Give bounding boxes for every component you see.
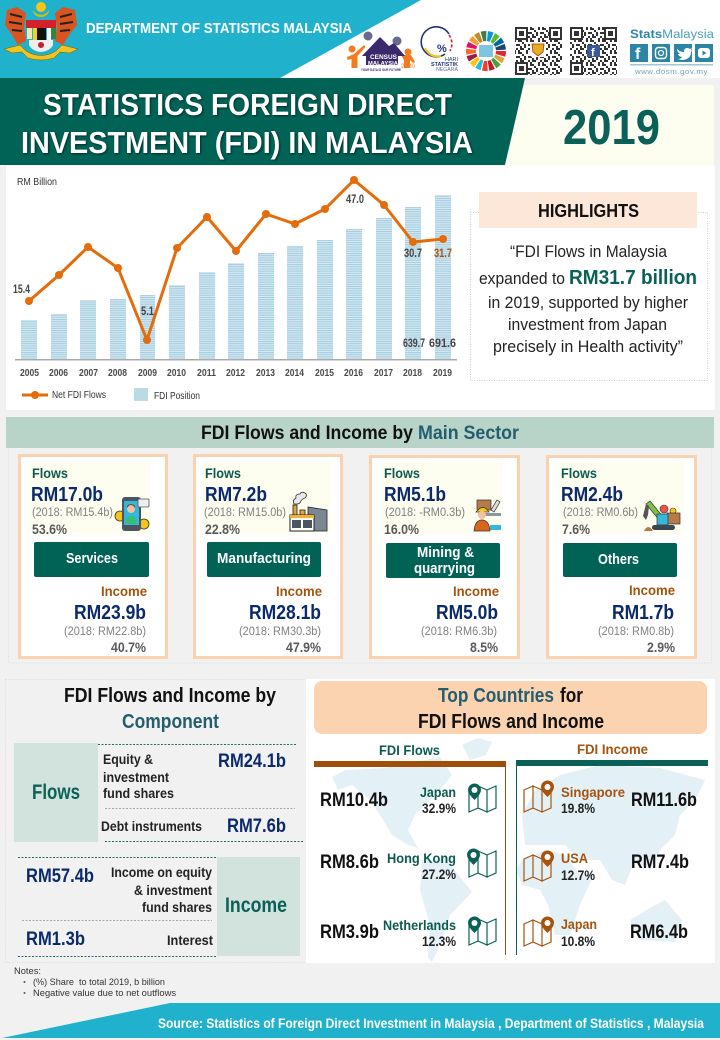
sector label: Manufacturing — [217, 550, 311, 567]
icon: census malaysia logo: YOUR DATA IS OUR FUTURE — [361, 68, 402, 72]
card: others: (2018: RM0.8b) — [598, 626, 674, 638]
income block: Income on equity — [111, 864, 212, 880]
card: mining and quarrying: 8.5% — [470, 640, 498, 655]
year labels: 2014 — [285, 367, 304, 379]
component heading — [64, 685, 277, 733]
icon: excavator and produce — [643, 501, 680, 531]
highlights quote — [479, 242, 697, 356]
card: services: (2018: RM22.8b) — [64, 626, 146, 638]
panel: main sector — [6, 417, 714, 663]
card: mining and quarrying: (2018: -RM0.3b) — [385, 507, 465, 519]
row: Hong Kong flows: 27.2% — [422, 866, 456, 882]
card: others: RM2.4b — [561, 484, 623, 506]
chart axis title: RM Billion — [17, 177, 57, 188]
flows block: Debt instruments — [101, 818, 202, 834]
data labels — [13, 194, 456, 350]
icon: coat of arms — [4, 2, 78, 60]
icon: hari statistik negara logo: % — [437, 43, 447, 55]
StatsMalaysia social block: Stats Malaysia — [630, 29, 715, 41]
icon: phone with customer agent — [115, 497, 149, 531]
legend: Net FDI Flows — [52, 390, 106, 401]
income block: RM1.3b — [26, 929, 85, 950]
highlights quote: investment from Japan — [508, 315, 667, 334]
income block — [18, 857, 300, 956]
card: manufacturing: (2018: RM15.0b) — [204, 507, 286, 519]
row: Singapore income: RM11.6b — [631, 790, 697, 811]
sector label — [34, 542, 149, 577]
year labels: 2018 — [403, 367, 422, 379]
panel: highlights — [470, 192, 708, 380]
row: USA income: USA — [561, 850, 588, 866]
data labels: 639.7 — [403, 338, 425, 350]
card: services: Flows — [32, 465, 68, 481]
column: FDI income — [516, 741, 708, 955]
highlights heading: HIGHLIGHTS — [538, 201, 639, 221]
row: Hong Kong flows: Hong Kong — [387, 850, 456, 866]
highlights quote: “FDI Flows in Malaysia — [510, 242, 667, 261]
header: department name: DEPARTMENT OF STATISTICS MALAYSIA — [86, 20, 352, 37]
income block: fund shares — [142, 899, 212, 915]
flows block: Flows — [32, 781, 80, 804]
highlights heading — [479, 192, 697, 228]
main sector heading: Main Sector — [418, 423, 520, 444]
row: Japan flows: 32.9% — [422, 800, 456, 816]
row: USA income: RM7.4b — [631, 852, 689, 873]
main sector heading — [6, 417, 714, 448]
top countries heading — [314, 681, 707, 734]
data labels: 30.7 — [404, 248, 422, 260]
year labels: 2019 — [433, 367, 452, 379]
row: Japan flows: Japan — [420, 784, 456, 800]
year panel: 2019 — [563, 101, 660, 155]
card: mining and quarrying: Income — [453, 583, 499, 599]
card: manufacturing: (2018: RM30.3b) — [239, 626, 321, 638]
row: Japan income: Japan — [561, 916, 597, 932]
data labels: 47.0 — [346, 194, 364, 206]
year labels: 2015 — [315, 367, 334, 379]
component heading: Component — [122, 711, 219, 733]
row: Singapore income — [524, 780, 697, 816]
card: mining and quarrying — [370, 456, 518, 658]
card: manufacturing: 47.9% — [286, 640, 321, 655]
row: Hong Kong flows: RM8.6b — [320, 852, 379, 873]
chart: net FDI flows and FDI position — [13, 176, 457, 402]
flows block: Equity & — [103, 751, 153, 767]
title banner: INVESTMENT (FDI) IN MALAYSIA — [21, 125, 473, 160]
top countries heading: FDI Flows and Income — [418, 711, 604, 733]
card: services: Income — [101, 583, 147, 599]
income block: Interest — [167, 932, 213, 948]
icon: hari statistik negara logo: STATISTIK — [431, 62, 458, 68]
card: services: 40.7% — [111, 640, 146, 655]
column: FDI income: FDI Income — [577, 741, 648, 757]
card: others: 2.9% — [647, 640, 675, 655]
card: manufacturing: RM7.2b — [205, 484, 267, 506]
row: Japan flows: RM10.4b — [320, 790, 388, 811]
card: others — [548, 456, 696, 658]
panel: chart background — [6, 166, 715, 410]
icon: hari statistik negara logo: NEGARA — [436, 67, 458, 73]
title banner: STATISTICS FOREIGN DIRECT — [43, 87, 452, 122]
year labels: 2005 — [20, 367, 39, 379]
card: others: (2018: RM0.6b) — [563, 507, 638, 519]
icon: sustainable development goals ring — [471, 36, 501, 66]
highlights quote: in 2019, supported by higher — [488, 293, 688, 312]
notes — [14, 966, 176, 999]
card: mining and quarrying: RM5.0b — [436, 602, 498, 624]
card: mining and quarrying: RM5.1b — [384, 484, 446, 506]
row: Singapore income: 19.8% — [561, 800, 595, 816]
column: FDI flows — [314, 742, 506, 955]
row: Netherlands flows: 12.3% — [422, 933, 456, 949]
data labels: 691.6 — [429, 338, 456, 350]
top countries heading: Top Countries — [438, 685, 554, 707]
card: mining and quarrying: 16.0% — [384, 522, 419, 537]
main sector heading: FDI Flows and Income by — [201, 423, 413, 444]
card: others: Flows — [561, 465, 597, 481]
icon: census malaysia logo — [347, 32, 416, 72]
flows block — [14, 743, 303, 842]
icon: census malaysia logo: 2020 — [401, 64, 416, 70]
year labels: 2008 — [108, 367, 127, 379]
year labels: 2010 — [167, 367, 186, 379]
legend: FDI Position — [154, 391, 200, 402]
year labels: 2009 — [138, 367, 157, 379]
year labels: 2007 — [79, 367, 98, 379]
row: Hong Kong flows — [320, 849, 496, 882]
row: Netherlands flows — [320, 916, 496, 949]
icon: factory — [290, 492, 327, 531]
row: Japan flows — [320, 784, 496, 816]
notes: Notes: — [14, 966, 41, 977]
notes: (%) Share to total 2019, b billion — [33, 977, 165, 988]
row: Japan income — [524, 916, 688, 949]
row: Japan income: 10.8% — [561, 933, 595, 949]
card: others: RM1.7b — [612, 602, 674, 624]
sector label — [207, 542, 321, 577]
StatsMalaysia social block: www.dosm.gov.my — [634, 67, 708, 76]
line: net FDI flows — [25, 176, 447, 344]
card: mining and quarrying: (2018: RM6.3b) — [421, 626, 497, 638]
sector label: Mining & — [417, 544, 474, 561]
icon: QR code facebook — [570, 27, 617, 75]
panel: top countries — [306, 679, 715, 963]
sector label: Others — [598, 551, 639, 568]
sector label — [386, 543, 500, 578]
sector label: Services — [66, 550, 118, 567]
flows block: RM7.6b — [227, 816, 286, 837]
data labels: 31.7 — [434, 248, 452, 260]
icon: QR code facebook: f — [591, 47, 595, 59]
year labels: 2017 — [374, 367, 393, 379]
icon: miner — [474, 500, 501, 531]
year panel — [504, 85, 714, 167]
income block: Income — [225, 894, 287, 917]
sector label — [563, 543, 677, 577]
row: USA income — [524, 850, 689, 883]
card: manufacturing: Flows — [205, 465, 241, 481]
sector label: quarrying — [414, 560, 475, 577]
StatsMalaysia social block: f — [635, 46, 641, 63]
income block: RM57.4b — [26, 866, 94, 887]
card: others: 7.6% — [562, 522, 590, 537]
world map background — [332, 738, 705, 962]
flows block: investment — [103, 769, 169, 785]
card: manufacturing: RM28.1b — [249, 602, 321, 624]
card: manufacturing — [194, 456, 342, 658]
highlights quote: precisely in Health activity” — [493, 337, 683, 356]
card: services: (2018: RM15.4b) — [32, 507, 113, 519]
legend — [22, 388, 200, 402]
card: services: 53.6% — [32, 522, 67, 537]
year labels — [20, 367, 452, 379]
card: services — [20, 456, 166, 658]
card: others: Income — [629, 582, 675, 598]
top countries heading: for — [560, 685, 583, 707]
panel: component — [6, 680, 306, 962]
title banner — [0, 78, 525, 165]
icon: hari statistik negara logo: HARI — [445, 57, 458, 63]
year labels: 2016 — [344, 367, 363, 379]
icon: hari statistik negara logo — [421, 27, 458, 73]
icon: census malaysia logo: CENSUS — [370, 54, 398, 61]
row: Netherlands flows: RM3.9b — [320, 922, 379, 943]
flows block: RM24.1b — [218, 751, 286, 772]
card: manufacturing: Income — [276, 583, 322, 599]
StatsMalaysia social block — [630, 29, 715, 76]
data labels: 5.1 — [141, 306, 154, 318]
card: services: RM17.0b — [31, 484, 103, 506]
card: mining and quarrying: Flows — [384, 465, 420, 481]
header band — [0, 0, 720, 78]
bars: FDI position — [21, 195, 451, 359]
year labels: 2011 — [197, 367, 216, 379]
data labels: 15.4 — [13, 284, 30, 296]
component heading: FDI Flows and Income by — [64, 685, 277, 707]
icon: QR code website — [515, 27, 562, 75]
icon: census malaysia logo: MALAYSIA — [368, 61, 398, 67]
column: FDI flows: FDI Flows — [379, 742, 440, 758]
highlights quote: RM31.7 billion — [569, 267, 697, 289]
row: USA income: 12.7% — [561, 867, 595, 883]
footer source band — [2, 1003, 720, 1038]
row: Netherlands flows: Netherlands — [383, 917, 456, 933]
notes: Negative value due to net outflows — [33, 988, 176, 999]
year labels: 2013 — [256, 367, 275, 379]
row: Singapore income: Singapore — [561, 784, 625, 800]
card: manufacturing: 22.8% — [205, 522, 240, 537]
row: Japan income: RM6.4b — [630, 922, 688, 943]
income block: & investment — [134, 882, 212, 898]
flows block: fund shares — [103, 785, 174, 801]
year labels: 2012 — [226, 367, 245, 379]
year labels: 2006 — [49, 367, 68, 379]
card: services: RM23.9b — [74, 602, 146, 624]
highlights quote: expanded to — [479, 269, 565, 288]
